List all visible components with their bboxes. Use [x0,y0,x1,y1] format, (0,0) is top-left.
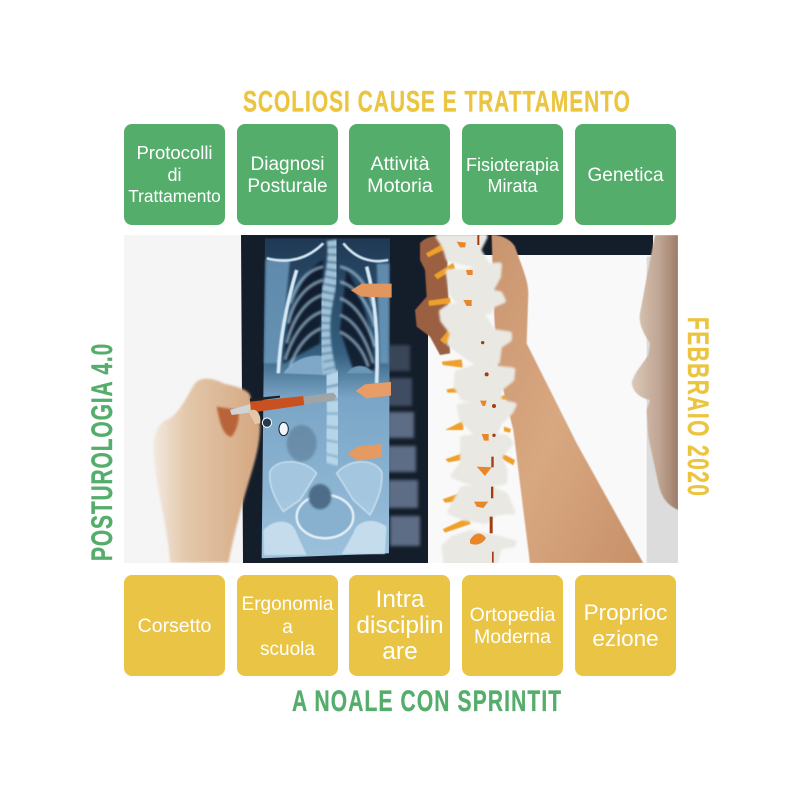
orange discs [426,243,515,533]
light box right side and face [632,235,680,563]
diaphragm [283,356,325,375]
dark lungs [283,260,323,363]
card: Diagnosi Posturale: Diagnosi [251,154,324,175]
card: Protocolli di Trattamento: Trattamento [128,186,221,206]
card: Protocolli di Trattamento: di [167,165,182,185]
card: Attività Motoria: Attività [370,153,430,175]
orange arrow tag 3 [347,444,382,461]
card: Genetica [575,124,676,225]
card: Ortopedia Moderna: Ortopedia [470,604,555,626]
right vertical label: FEBBRAIO 2020 [681,317,713,496]
card: Fisioterapia Mirata [462,124,563,225]
card: Attività Motoria [349,124,450,225]
card: Genetica: Genetica [587,165,664,186]
photo: x-ray, spine model and hands [124,235,680,563]
dark light-box panel [241,235,653,563]
orange arrow tag 2 [356,382,391,398]
card: Intra disciplinare: are [382,638,418,665]
card: Propriocezione: Proprioc [584,600,667,625]
bottom row: yellow topic cards [124,575,676,676]
foramina [477,235,496,563]
card: Intra disciplinare [349,575,450,676]
card: Intra disciplinare: disciplin [356,612,444,639]
spine model [426,235,515,563]
card: Diagnosi Posturale: Posturale [247,176,328,197]
card: Propriocezione: ezione [592,626,659,651]
card: Ergonomia a scuola: scuola [260,639,315,660]
title: SCOLIOSI CAUSE E TRATTAMENTO [243,86,630,118]
card: Ortopedia Moderna: Moderna [474,626,551,648]
soft tissue at arms [264,260,290,363]
card: Ergonomia a scuola [237,575,338,676]
card: Ortopedia Moderna [462,575,563,676]
pelvis [270,462,317,512]
card: Fisioterapia Mirata: Fisioterapia [466,155,560,175]
clavicles and body outline [267,243,388,383]
left hand with pen [153,379,337,563]
card: Fisioterapia Mirata: Mirata [487,176,538,196]
top row: green topic cards [124,124,676,225]
card: Corsetto [124,575,225,676]
spine [324,240,334,373]
markers on x-ray [262,418,272,427]
orange arrow tag 1 [351,284,392,298]
pen [230,404,250,415]
card: Intra disciplinare: Intra [375,586,425,613]
card: Protocolli di Trattamento [124,124,225,225]
ribs [285,267,375,367]
vertebrae [438,237,514,563]
left vertical label: POSTUROLOGIA 4.0 [87,344,119,561]
x-ray image [262,238,392,558]
card: Attività Motoria: Motoria [367,175,433,197]
vertebrae reflection [388,345,420,546]
right hand and forearm [415,235,643,563]
card: Diagnosi Posturale [237,124,338,225]
card: Propriocezione [575,575,676,676]
bottom label: A NOALE CON SPRINTIT [292,686,561,718]
card: Ergonomia a scuola: Ergonomia [242,594,334,615]
card: Protocolli di Trattamento: Protocolli [136,142,213,163]
card: Corsetto: Corsetto [138,615,211,637]
card: Ergonomia a scuola: a [282,617,293,638]
